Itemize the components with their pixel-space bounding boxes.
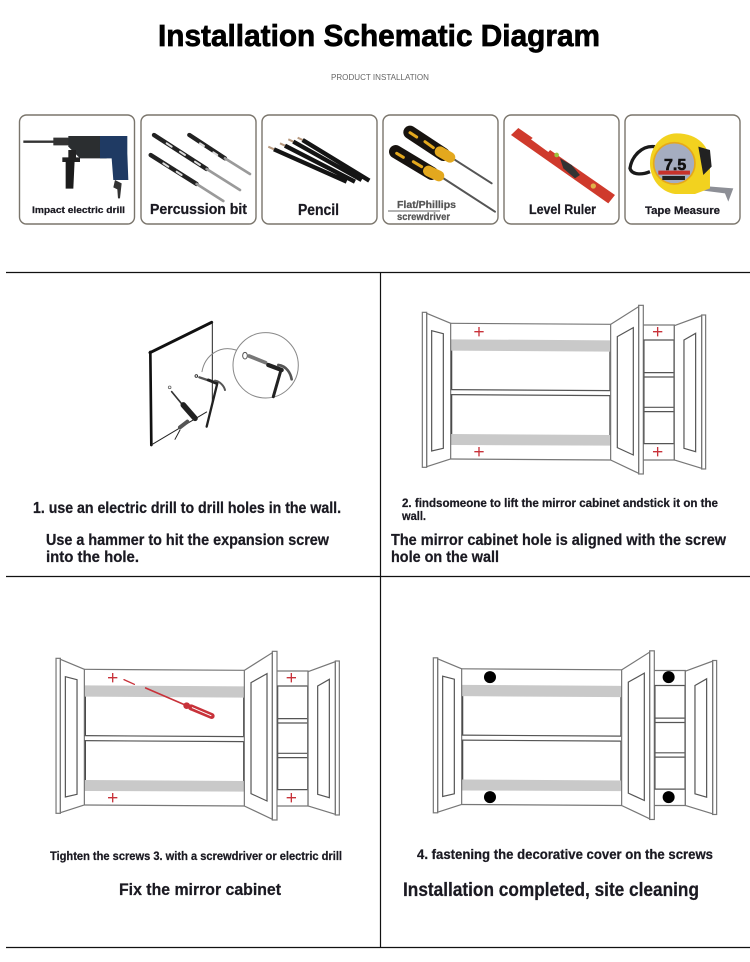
label: Pencil	[298, 202, 339, 219]
icon: red screwdriver	[124, 680, 212, 716]
illustration: cabinet with decorative covers	[433, 651, 717, 819]
illustration: drilling and hammering on wall	[150, 322, 298, 445]
text: step 1 hammer line 2: into the hole.	[46, 549, 139, 566]
title: Installation Schematic Diagram	[158, 18, 600, 53]
label: screwdriver	[397, 212, 450, 223]
text: step 2 aligned line 2: hole on the wall	[391, 549, 499, 566]
label: Impact electric drill	[32, 205, 125, 216]
text: step 1 hammer line 1: Use a hammer to hit the expansion screw	[46, 532, 329, 549]
text: step 2 line 2: wall.	[401, 509, 426, 523]
tool card: level ruler	[504, 115, 619, 224]
panel: step 1	[33, 322, 341, 566]
icon: drill	[23, 136, 128, 198]
icon: screwdrivers	[396, 132, 495, 212]
text: step 3 tighten: Tighten the screws 3. with a screwdriver or electric drill	[50, 849, 342, 863]
tool card: percussion bit	[141, 115, 256, 224]
icon: level	[511, 128, 615, 203]
tool card: pencil	[262, 115, 377, 224]
panel: step 3	[50, 651, 342, 899]
tool card: screwdriver	[383, 115, 498, 224]
subtitle: PRODUCT INSTALLATION	[331, 73, 429, 82]
panel: step 2	[391, 305, 727, 566]
divider stroke	[388, 210, 440, 212]
tape measure reading: 7.5	[664, 157, 686, 174]
text: step 2 line 1: 2. findsomeone to lift the mirror cabinet andstick it on the	[402, 496, 718, 510]
icon: drill bits	[151, 135, 250, 201]
text: step 3 fix: Fix the mirror cabinet	[119, 880, 281, 899]
illustration: cabinet with screw marks	[422, 305, 706, 474]
label: Level Ruler	[529, 202, 597, 217]
text: step 1 drill: 1. use an electric drill to drill holes in the wall.	[33, 500, 341, 517]
text: step 4 fastening: 4. fastening the decorative cover on the screws	[417, 847, 713, 862]
tool card: tape measure	[625, 115, 740, 224]
panel: step 4	[403, 651, 717, 901]
panel grid lines	[6, 272, 750, 948]
label: Tape Measure	[645, 205, 720, 217]
icon: pencils	[268, 138, 369, 182]
label: Flat/Phillips	[397, 200, 456, 211]
tool card: impact electric drill	[20, 115, 134, 224]
icon: tape measure	[630, 133, 733, 202]
label: Percussion bit	[150, 201, 247, 218]
text: step 4 completed: Installation completed, site cleaning	[403, 880, 699, 901]
illustration: cabinet with screwdriver	[56, 651, 339, 820]
